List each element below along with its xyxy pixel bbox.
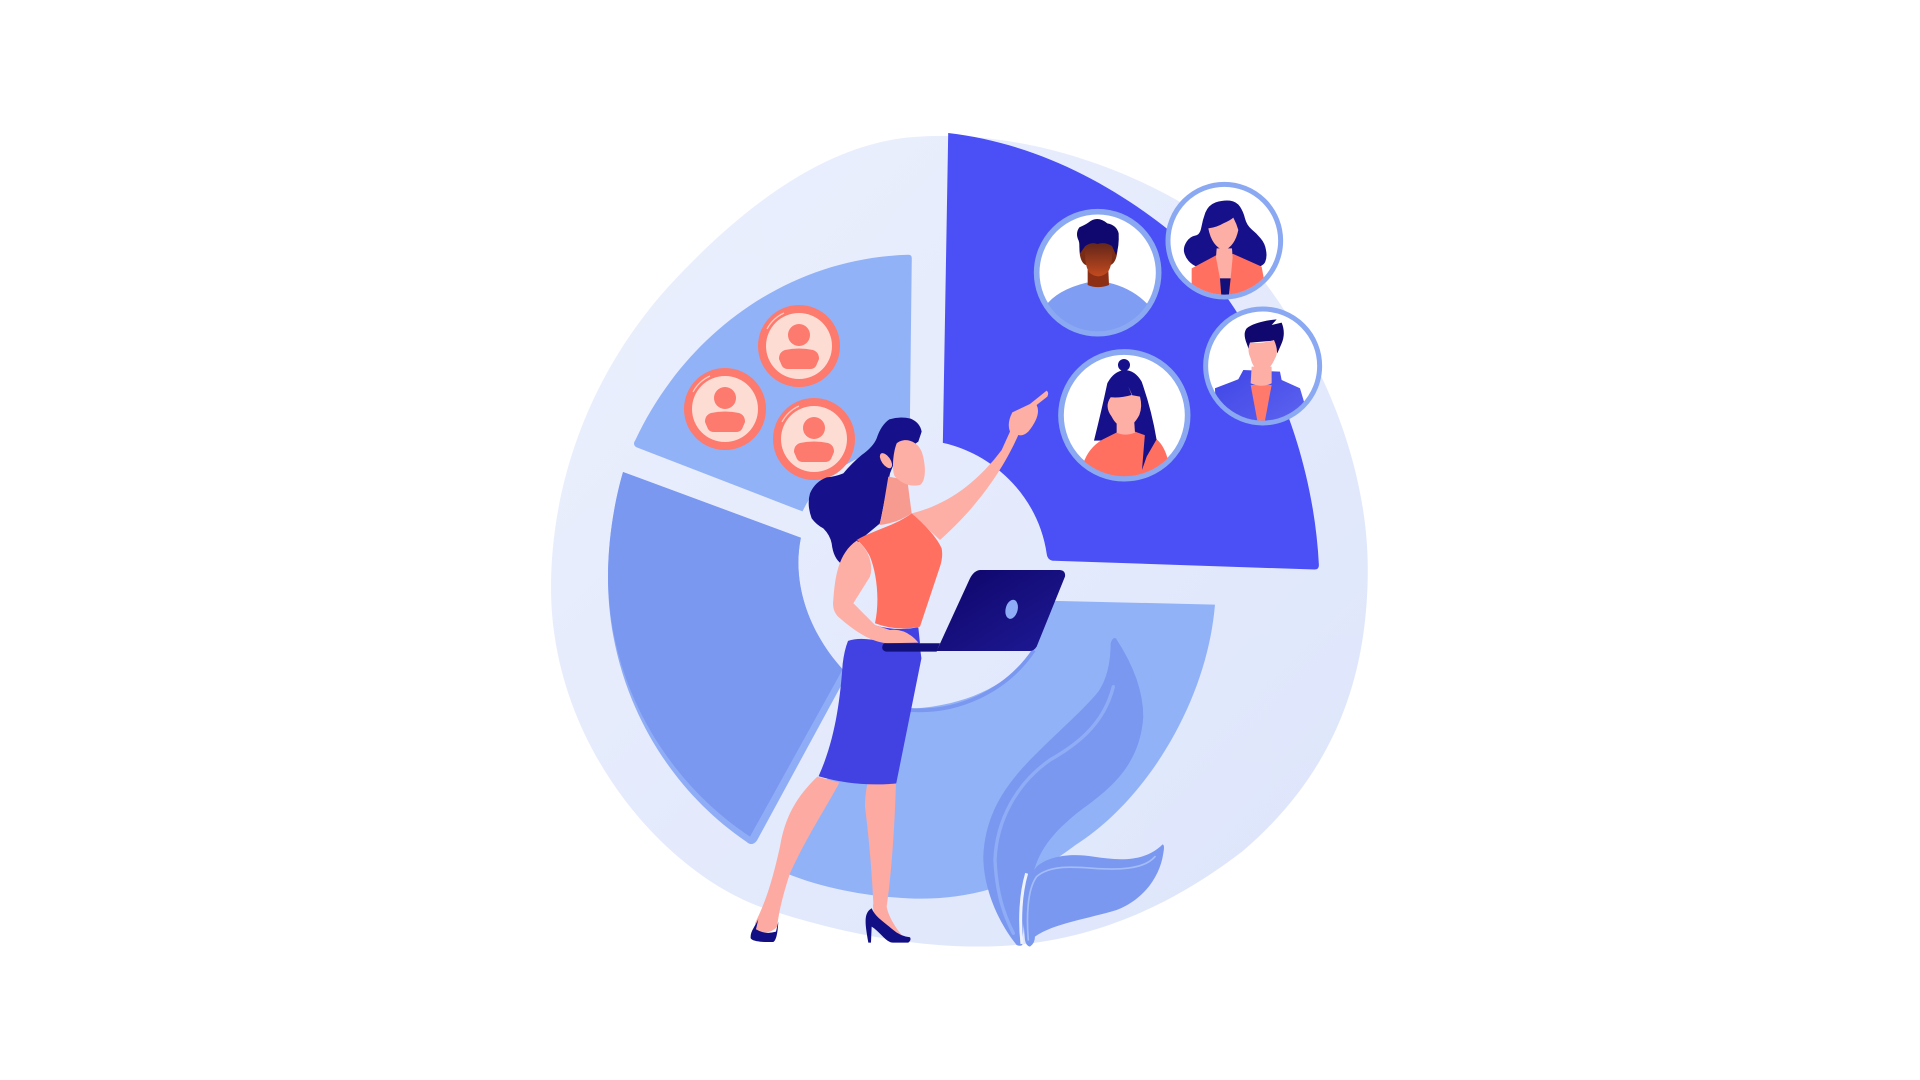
background blob bbox=[551, 136, 1368, 947]
illustration: audience pie chart with presenter bbox=[551, 133, 1368, 947]
upper body bbox=[809, 391, 1048, 643]
avatar: woman with wavy hair and coral jacket bbox=[1168, 184, 1281, 303]
avatar: man in blue jacket bbox=[1206, 309, 1320, 433]
icon: laptop bbox=[882, 570, 1065, 652]
leaf: large bbox=[983, 638, 1143, 946]
leaf: small bbox=[1021, 844, 1164, 947]
avatar: man in blue sweater bbox=[1037, 212, 1159, 337]
pie slice: bottom light blue bbox=[786, 601, 1215, 899]
avatar: woman with top bun and coral shirt bbox=[1061, 352, 1188, 480]
coral user badge 1 bbox=[758, 305, 840, 387]
legs bbox=[755, 777, 903, 937]
skirt bbox=[819, 639, 921, 784]
pie slice: left medium blue bbox=[608, 472, 847, 844]
pie slice: upper left light blue bbox=[634, 255, 912, 511]
shoes bbox=[751, 908, 911, 943]
presenter woman bbox=[751, 391, 1065, 943]
coral user badge 3 bbox=[773, 398, 855, 480]
coral user badge 2 bbox=[684, 368, 766, 450]
pie slice: dark blue bbox=[943, 133, 1319, 570]
